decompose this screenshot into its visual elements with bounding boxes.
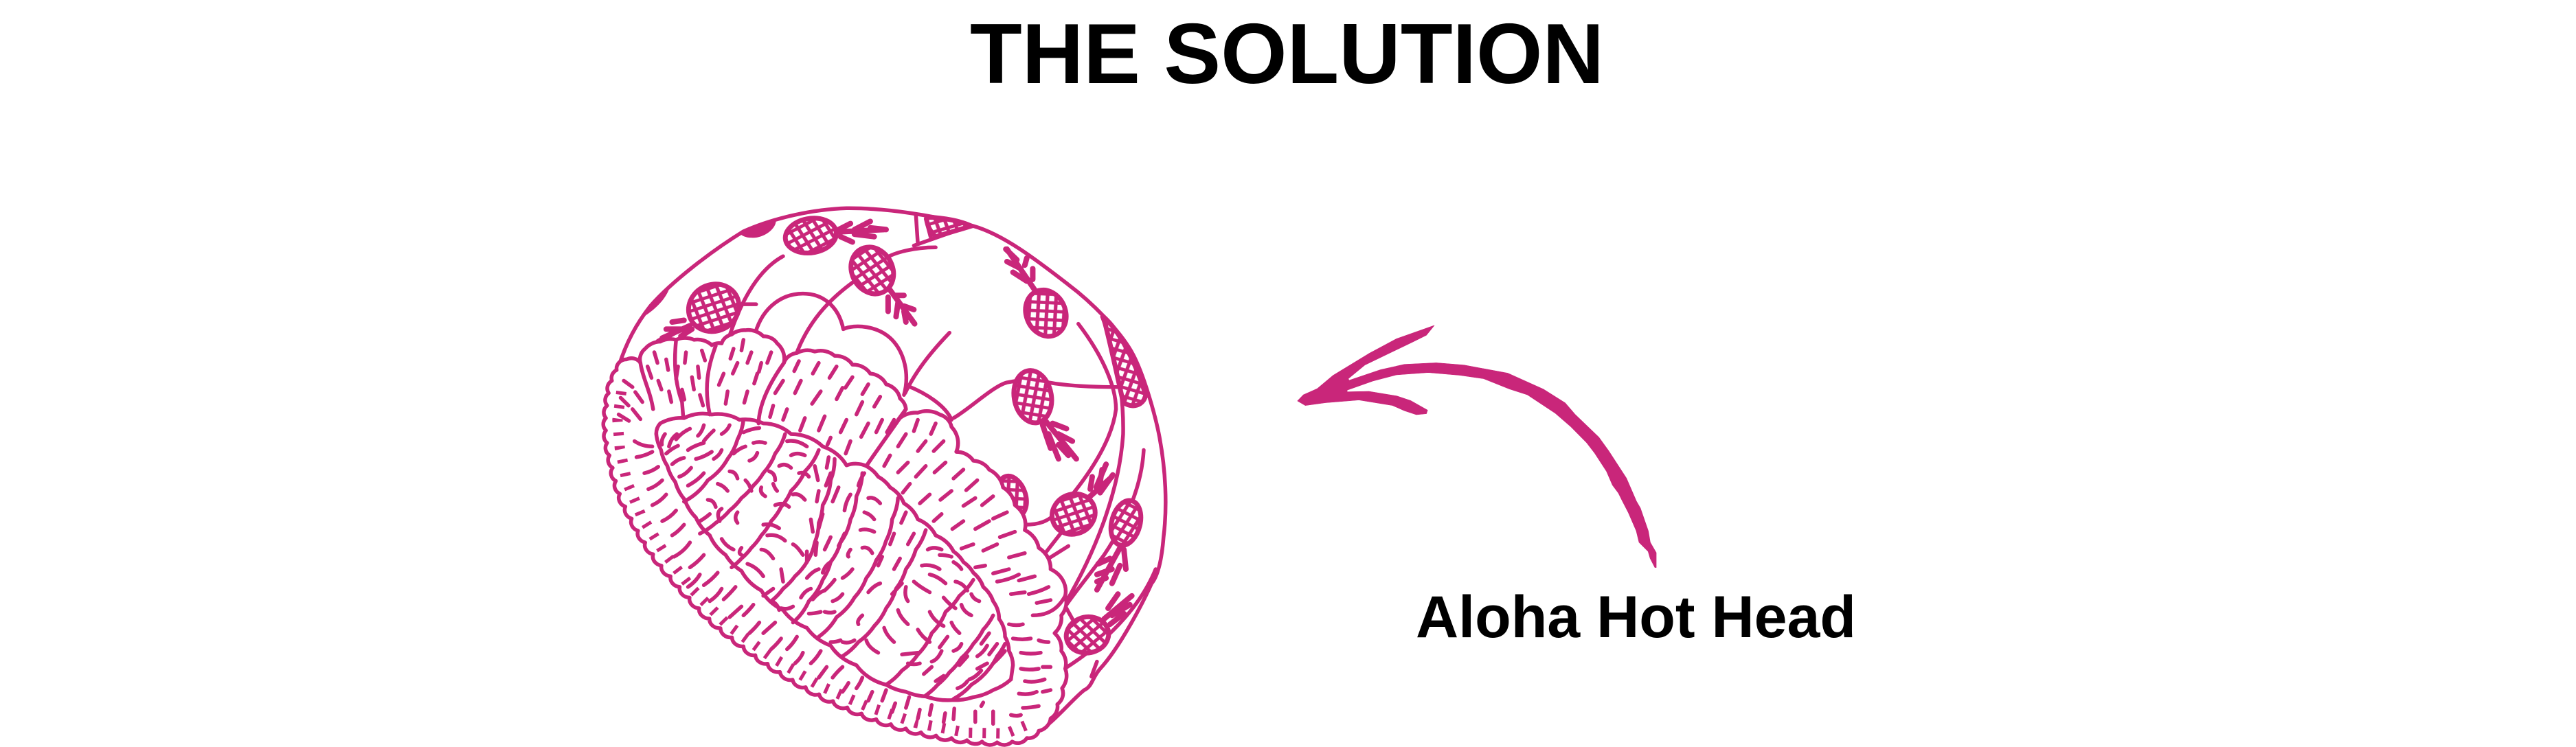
illustration: knitted beanie hat with pineapple pattern bbox=[603, 208, 1166, 745]
title: THE SOLUTION bbox=[970, 7, 1604, 102]
knit stitch marks inside the crown ribs bbox=[662, 425, 1005, 688]
pineapple 9: partly hidden by the cuff bbox=[993, 473, 1031, 519]
lower edge of the cuff bbox=[656, 413, 1013, 680]
pineapple 2 bbox=[782, 214, 886, 257]
pineapple slivers at top left edge bbox=[642, 221, 776, 317]
brim edge rib ticks bbox=[618, 391, 1027, 733]
hat dome outline bbox=[619, 208, 1166, 731]
pineapple 5 bbox=[1010, 368, 1076, 459]
pineapple 3 bbox=[844, 242, 915, 324]
knit stitch marks on the cuff bbox=[619, 340, 1050, 603]
dome seam lines and heart-shaped curve bbox=[727, 214, 1155, 676]
inner rib lines bbox=[684, 420, 1005, 699]
pineapple 6 bbox=[1044, 464, 1113, 541]
label: Aloha Hot Head: Aloha Hot Head bbox=[1416, 584, 1856, 650]
inner ring of the brim bbox=[656, 434, 1011, 700]
ribbed cuff and brim silhouette bbox=[603, 330, 1067, 745]
arrow bbox=[1298, 325, 1656, 568]
pineapple 7 bbox=[1097, 498, 1145, 590]
pineapple 1 bbox=[658, 276, 749, 342]
pineapple 4 bbox=[1006, 249, 1072, 341]
knit stitch marks on the brim bbox=[635, 441, 1050, 724]
pineapple 11: cut along the right seam bbox=[1103, 317, 1146, 406]
pineapple 10: partly cut at the top seam bbox=[927, 217, 971, 237]
pineapple 8 bbox=[1060, 594, 1132, 659]
cuff fold lines bbox=[640, 340, 1065, 615]
